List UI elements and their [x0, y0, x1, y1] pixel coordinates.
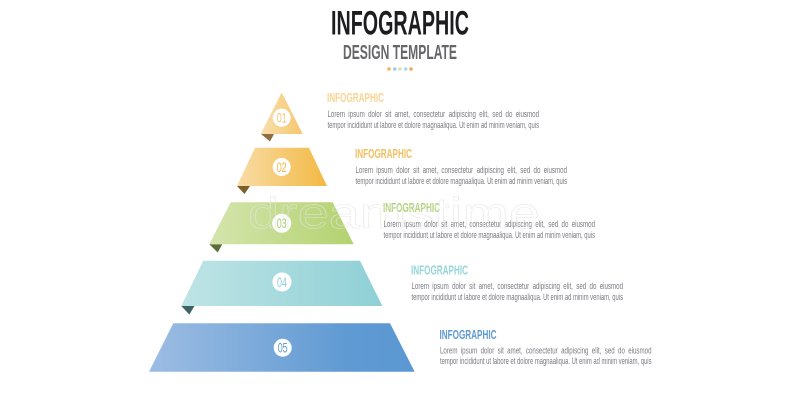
- text block 2: tempor incididunt ut labore et dolore magnaaliqua. Ut enim ad minim veniam, quis: [356, 175, 567, 186]
- text block 1: tempor incididunt ut labore et dolore magnaaliqua. Ut enim ad minim veniam, quis: [328, 119, 539, 130]
- pyramid tier 3: [209, 202, 354, 252]
- text block 5: Lorem ipsum dolor sit amet, consectetur adipiscing elit, sed do eiusmod: [440, 344, 652, 356]
- text block 2: Lorem ipsum dolor sit amet, consectetur adipiscing elit, sed do eiusmod: [356, 164, 567, 175]
- text block 3: Lorem ipsum dolor sit amet, consectetur adipiscing elit, sed do eiusmod: [384, 218, 595, 229]
- text block 4: Lorem ipsum dolor sit amet, consectetur adipiscing elit, sed do eiusmod: [412, 280, 623, 291]
- text block 3: [383, 200, 595, 240]
- subtitle: DESIGN TEMPLATE: [343, 42, 457, 64]
- text block 1: Lorem ipsum dolor sit amet, consectetur adipiscing elit, sed do eiusmod: [328, 108, 539, 119]
- pyramid tier 5: [149, 323, 415, 372]
- text block 4: INFOGRAPHIC: [411, 262, 468, 278]
- title: INFOGRAPHIC: [331, 4, 469, 42]
- text block 1: [327, 90, 539, 130]
- text block 3: tempor incididunt ut labore et dolore magnaaliqua. Ut enim ad minim veniam, quis: [384, 229, 595, 240]
- watermark: dreamstime: [248, 189, 540, 238]
- pyramid tier 3: 03: [277, 216, 287, 231]
- pyramid tier 2: 02: [277, 160, 287, 175]
- text block 5: INFOGRAPHIC: [440, 327, 497, 342]
- text block 2: [355, 146, 567, 186]
- text block 5: [440, 327, 652, 366]
- pyramid tier 5: 05: [278, 340, 288, 356]
- pyramid tier 4: 04: [277, 275, 287, 290]
- text block 3: INFOGRAPHIC: [383, 200, 440, 215]
- text block 1: INFOGRAPHIC: [327, 90, 384, 105]
- text block 4: tempor incididunt ut labore et dolore magnaaliqua. Ut enim ad minim veniam, quis: [412, 291, 623, 302]
- text block 5: tempor incididunt ut labore et dolore magnaaliqua. Ut enim ad minim veniam, quis: [440, 355, 652, 366]
- pyramid tier 2: [237, 148, 327, 194]
- pyramid tier 1: [261, 92, 303, 142]
- text block 4: [411, 262, 623, 302]
- pyramid tier 4: [181, 261, 382, 314]
- decorative dots: [387, 67, 413, 71]
- pyramid tier 1: 01: [277, 110, 287, 126]
- text block 2: INFOGRAPHIC: [355, 146, 412, 161]
